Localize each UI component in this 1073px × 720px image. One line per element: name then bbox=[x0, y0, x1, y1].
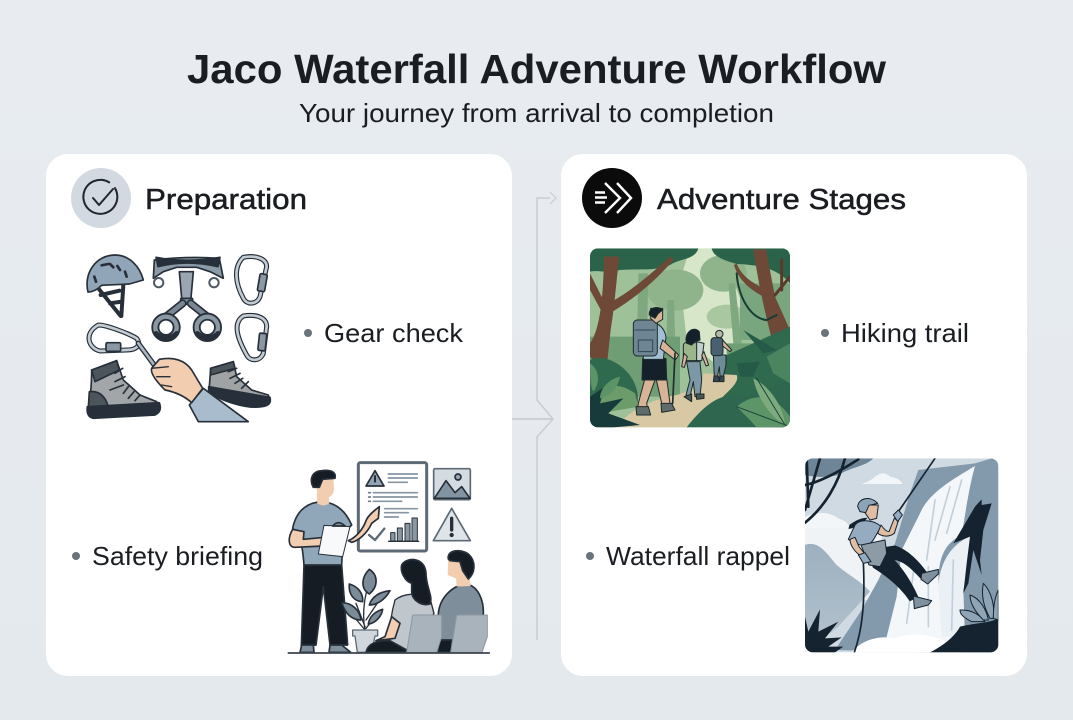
misty background trees bbox=[590, 255, 790, 400]
bullet: waterfall rappel: Waterfall rappel bbox=[606, 541, 790, 571]
icon: right boot bbox=[209, 362, 270, 407]
illustration: climbing gear bbox=[87, 255, 270, 422]
bullet: gear check: Gear check bbox=[324, 318, 464, 348]
illustration: jungle hiking trail bbox=[590, 248, 790, 427]
dark rock crack bbox=[953, 499, 992, 593]
illustration: waterfall rappel bbox=[805, 458, 998, 652]
floor line bbox=[288, 650, 489, 655]
icon: forward arrows bbox=[582, 168, 642, 228]
hikers bbox=[633, 308, 732, 415]
hiker middle bbox=[682, 329, 709, 402]
illustration: safety briefing scene bbox=[288, 463, 489, 653]
climber bbox=[848, 499, 938, 609]
cliff rock bbox=[835, 458, 998, 652]
icon: harness bbox=[153, 257, 223, 338]
foam at base bbox=[852, 634, 962, 652]
picture card bbox=[434, 469, 470, 500]
heading: adventure stages: Adventure Stages bbox=[657, 184, 906, 216]
infographic canvas bbox=[46, 54, 1027, 676]
distant mountains bbox=[805, 544, 870, 652]
ferns and undergrowth bbox=[590, 327, 790, 413]
bullet: hiking trail: Hiking trail bbox=[841, 318, 969, 348]
icon: check circle bbox=[71, 168, 131, 228]
icon: carabiner top bbox=[236, 257, 267, 303]
clouds bbox=[805, 473, 902, 528]
dirt trail bbox=[620, 373, 737, 427]
bullet: safety briefing: Safety briefing bbox=[92, 541, 263, 571]
subtitle: Your journey from arrival to completion bbox=[299, 98, 774, 128]
icon: carabiner held bbox=[89, 325, 157, 368]
hiker far bbox=[711, 330, 732, 382]
heading: preparation: Preparation bbox=[145, 184, 307, 216]
seated woman bbox=[366, 560, 434, 652]
panel: adventure stages bbox=[561, 154, 1027, 676]
panel: preparation bbox=[46, 154, 512, 676]
connector arrows between panels bbox=[512, 192, 556, 640]
warning triangle bbox=[433, 508, 470, 541]
top-left tree branches bbox=[805, 458, 873, 523]
icon: helmet bbox=[87, 255, 143, 316]
briefing board bbox=[358, 463, 427, 551]
chairs bbox=[407, 615, 487, 652]
foreground leaves left bbox=[805, 609, 843, 652]
icon: hand and sleeve bbox=[151, 358, 248, 422]
foreground rock bbox=[930, 618, 998, 652]
foreground leaves right bbox=[960, 583, 998, 622]
foreground leaves bbox=[590, 330, 790, 427]
icon: carabiner bottom bbox=[237, 315, 267, 360]
hiker front bbox=[633, 308, 679, 415]
rope bbox=[854, 458, 935, 652]
seated man bbox=[438, 551, 483, 652]
title: Jaco Waterfall Adventure Workflow bbox=[187, 46, 886, 92]
foreground trunks and canopy bbox=[590, 248, 790, 360]
presenter bbox=[289, 470, 379, 652]
icon: left boot bbox=[87, 361, 160, 418]
plant bbox=[342, 569, 390, 652]
waterfall bbox=[885, 466, 975, 643]
